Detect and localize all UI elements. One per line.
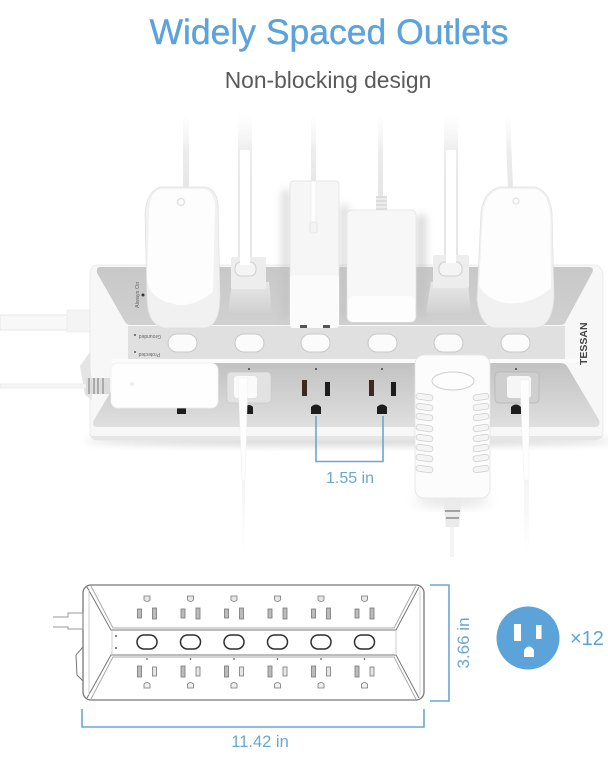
power buttons (168, 334, 530, 352)
diagram buttons (137, 635, 374, 649)
count label: ×12 (570, 628, 604, 650)
diagram outlets (138, 596, 374, 688)
subtitle: Non-blocking design (225, 67, 431, 93)
button band (128, 326, 565, 359)
adapter 1 (145, 187, 220, 328)
rocker switch side (80, 352, 92, 400)
upper recessed panel (97, 267, 593, 325)
dimension: depth (430, 585, 473, 701)
exposed outlets (177, 368, 521, 414)
indicator labels: Protected (138, 351, 160, 357)
outline diagram of strip (53, 585, 424, 700)
plug 2 (228, 150, 272, 313)
side-mounted adapter with thin cord (0, 363, 218, 408)
title: Widely Spaced Outlets (149, 12, 509, 52)
large vented adapter (415, 355, 490, 557)
power cord (0, 310, 91, 332)
plug 5 (426, 150, 471, 313)
rear cords (183, 113, 513, 263)
adapter 4 (347, 196, 416, 322)
adapter 6 (477, 187, 554, 328)
icon: outlet count badge (496, 606, 560, 670)
plug front left (227, 372, 271, 556)
diagram power cord (53, 613, 83, 629)
dimension: length: 11.42 in (231, 733, 289, 751)
indicator labels: Always On (135, 282, 141, 308)
soft contact shadows behind adapters (282, 190, 426, 320)
lower recessed panel (93, 363, 600, 427)
dimension: length (82, 709, 424, 751)
dimension: outlet spacing: 1.55 in (326, 470, 374, 487)
strip body (90, 265, 603, 440)
dimension: depth: 3.66 in (454, 617, 473, 669)
indicator labels (134, 282, 161, 357)
plug front right (495, 372, 539, 554)
indicator labels: Grounded (139, 333, 161, 339)
charger 3 (290, 181, 339, 328)
dimension: outlet spacing (316, 416, 383, 487)
power strip photo (0, 113, 608, 557)
brand: TESSAN (578, 322, 590, 365)
